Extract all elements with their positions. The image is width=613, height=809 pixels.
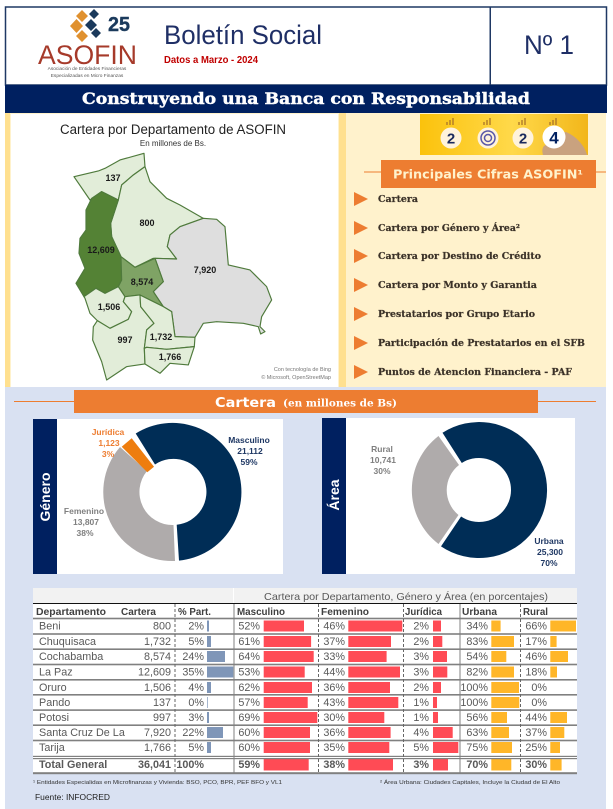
- section heading: Cartera: [14, 390, 596, 413]
- table row: Santa Cruz: 4%: [413, 727, 429, 739]
- date subtitle: Datos a Marzo - 2024: [164, 55, 258, 66]
- label: Área: Área: [326, 479, 342, 511]
- donut: area: [412, 422, 547, 558]
- header box: [6, 7, 606, 85]
- banner image: 2024: [420, 114, 588, 155]
- table row: Total General: 30%: [525, 759, 547, 771]
- logo: ASOFIN: Especializadas en Micro Finanzas: [51, 73, 124, 79]
- label: Urbana: Urbana: [534, 536, 564, 546]
- table row: Total General: 59%: [238, 759, 260, 771]
- table row: Santa Cruz: 7,920: [144, 727, 171, 739]
- slogan band: Construyendo una Banca con Responsabilidad: [82, 89, 530, 108]
- table super heading: Cartera por Departamento, Género y Área (en porcentajes): [264, 590, 548, 603]
- banner image: 2024: 2: [447, 130, 455, 148]
- table row: Pando: 100%: [460, 697, 488, 709]
- table row: Pando: 0%: [188, 697, 204, 709]
- table column headers: [36, 606, 548, 618]
- label: Género: Género: [37, 472, 53, 522]
- table row: Beni: Beni: [39, 620, 61, 632]
- panel: gender donut chart: [33, 419, 283, 574]
- table data bars: area: [491, 620, 576, 770]
- table row: La Paz: La Paz: [39, 666, 73, 678]
- table row: Oruro: 0%: [531, 682, 547, 694]
- map values: 800: [139, 218, 155, 228]
- label: Masculino: 59%: [240, 457, 258, 467]
- top section background: [5, 113, 606, 387]
- footnote 1: ¹ Entidades Especialidas en Microfinanzas y Vivienda: BSO, PCO, BPR, PEF BFO y VL1: [33, 780, 282, 786]
- table row: Tarija: Tarija: [39, 742, 65, 754]
- table row: Chuquisaca: 5%: [188, 636, 204, 648]
- table column headers: Departamento: [36, 606, 106, 618]
- table row: La Paz: 3%: [413, 666, 429, 678]
- map values: 137: [105, 173, 121, 183]
- table row: La Paz: 44%: [323, 666, 345, 678]
- map title: Cartera por Departamento de ASOFIN: [60, 122, 286, 137]
- table row: Cochabamba: 8,574: [144, 651, 171, 663]
- section heading: Cartera: (en millones de Bs): [283, 398, 397, 410]
- section heading: Principales Cifras: [364, 160, 606, 188]
- list of contents: Cartera por Monto y Garantia: [378, 280, 537, 291]
- label: Urbana: 25,300: [537, 547, 563, 557]
- table row: Beni: 800: [153, 620, 171, 632]
- table row: Pando: Pando: [39, 697, 70, 709]
- title: Boletín Social: Boletín Social: [164, 20, 322, 50]
- table row: Chuquisaca: [39, 636, 547, 648]
- table row: Potosi: 3%: [188, 712, 204, 724]
- panel: map of portfolio by department: [11, 114, 338, 387]
- table row: Tarija: [39, 742, 547, 754]
- lower section background: [5, 387, 606, 809]
- table row: Oruro: Oruro: [39, 682, 67, 694]
- table row: Potosi: 30%: [323, 712, 345, 724]
- table row: Beni: [39, 620, 547, 632]
- table row: Beni: 52%: [238, 620, 260, 632]
- table row: Beni: 2%: [413, 620, 429, 632]
- label: Femenino: 13,807: [73, 517, 99, 527]
- label: Rural: [370, 444, 396, 476]
- list of contents: Prestatarios por Grupo Etario: [378, 309, 535, 320]
- table row: La Paz: 18%: [525, 666, 547, 678]
- label: Femenino: Femenino: [64, 506, 104, 516]
- table row: Pando: 0%: [531, 697, 547, 709]
- table column headers: Urbana: [462, 606, 497, 618]
- table row: Chuquisaca: 61%: [238, 636, 260, 648]
- table row: Cochabamba: Cochabamba: [39, 651, 103, 663]
- map values: 1,732: [150, 332, 172, 342]
- section heading: Principales Cifras: Principales Cifras ASOFIN¹: [393, 168, 583, 182]
- table row: Santa Cruz: 36%: [323, 727, 345, 739]
- table row lines: [33, 603, 577, 774]
- label: Rural: 10,741: [370, 455, 396, 465]
- table row: Chuquisaca: 17%: [525, 636, 547, 648]
- label: Jurídica: 3%: [102, 449, 115, 459]
- footnote 2: ² Área Urbana: Ciudades Capitales, Incluye la Ciudad de El Alto: [380, 779, 560, 786]
- choropleth map: [74, 153, 272, 380]
- table row: Potosi: 44%: [525, 712, 547, 724]
- label: Rural: 30%: [373, 466, 391, 476]
- table row: Oruro: 2%: [413, 682, 429, 694]
- table column headers: Jurídica: [405, 606, 442, 618]
- table data bars: share: [207, 620, 233, 753]
- map values: 8,574: [131, 277, 153, 287]
- table row: Santa Cruz: 60%: [238, 727, 260, 739]
- table row: Chuquisaca: 83%: [466, 636, 488, 648]
- label: Masculino: [228, 435, 270, 467]
- table row: Total General: Total General: [39, 759, 107, 771]
- label: Urbana: 70%: [540, 558, 558, 568]
- table row: Cochabamba: 64%: [238, 651, 260, 663]
- table row: Santa Cruz: 22%: [182, 727, 204, 739]
- table row: Potosi: Potosi: [39, 712, 69, 724]
- label: Femenino: 38%: [76, 528, 94, 538]
- table row: Oruro: 1,506: [144, 682, 171, 694]
- table row: Beni: 34%: [466, 620, 488, 632]
- table row: Chuquisaca: 2%: [413, 636, 429, 648]
- list of contents: [354, 192, 585, 379]
- table row: Total General: 3%: [413, 759, 429, 771]
- map attribution: Con tecnología de Bing: [274, 367, 331, 373]
- table column headers: Rural: [523, 606, 548, 618]
- table row: Potosi: 69%: [238, 712, 260, 724]
- issue number: Nº 1: [524, 30, 574, 60]
- logo: ASOFIN: Asociación de Entidades Financieras: [48, 66, 127, 72]
- logo: ASOFIN: [38, 9, 137, 79]
- list of contents: Cartera: [378, 194, 418, 205]
- table row: Potosi: [39, 712, 547, 724]
- table row: Total General: 70%: [466, 759, 488, 771]
- banner image: 2024: 4: [549, 128, 559, 148]
- label: Urbana: [534, 536, 564, 568]
- table row: Potosi: 1%: [413, 712, 429, 724]
- table row: Cochabamba: 24%: [182, 651, 204, 663]
- table row: Oruro: 62%: [238, 682, 260, 694]
- label: Rural: Rural: [371, 444, 393, 454]
- table row: La Paz: 82%: [466, 666, 488, 678]
- table row: Oruro: 4%: [188, 682, 204, 694]
- list of contents: Participación de Prestatarios en el SFB: [378, 338, 585, 349]
- table row: Chuquisaca: 1,732: [144, 636, 171, 648]
- map values: [87, 173, 216, 362]
- table row: Pando: 137: [153, 697, 171, 709]
- label: Masculino: Masculino: [228, 435, 270, 445]
- table row: Tarija: 25%: [525, 742, 547, 754]
- map subtitle: En millones de Bs.: [140, 139, 206, 148]
- slogan band: [5, 85, 607, 113]
- list of contents: Puntos de Atencion Financiera - PAF: [378, 367, 572, 378]
- table row: Total General: 38%: [323, 759, 345, 771]
- table row: La Paz: 12,609: [138, 666, 171, 678]
- source: Fuente: INFOCRED: [35, 793, 110, 802]
- table: portfolio by department, gender and area: [33, 588, 577, 774]
- table row: Total General: [39, 759, 547, 771]
- list of contents: Cartera por Género y Área²: [378, 222, 520, 234]
- label: Jurídica: [92, 427, 125, 459]
- table row: Tarija: 1,766: [144, 742, 171, 754]
- map values: 1,766: [159, 352, 181, 362]
- table row: Tarija: 35%: [323, 742, 345, 754]
- table row: La Paz: 35%: [182, 666, 204, 678]
- table row: Cochabamba: 54%: [466, 651, 488, 663]
- table row: Beni: 46%: [323, 620, 345, 632]
- table column headers: Femenino: [321, 606, 369, 618]
- table row: Chuquisaca: Chuquisaca: [39, 636, 96, 648]
- table row: Beni: 66%: [525, 620, 547, 632]
- map values: 12,609: [87, 245, 115, 255]
- table row: Total General: 36,041: [138, 759, 171, 771]
- logo: ASOFIN: ASOFIN: [38, 40, 137, 70]
- table row: Santa Cruz: 63%: [466, 727, 488, 739]
- banner image: 2024: 2: [519, 130, 527, 148]
- label: Jurídica: 1,123: [98, 438, 120, 448]
- table row: Cochabamba: 3%: [413, 651, 429, 663]
- map attribution: © Microsoft, OpenStreetMap: [261, 374, 331, 381]
- table row: La Paz: [39, 666, 547, 678]
- map attribution: [261, 367, 331, 381]
- table row: Potosi: 56%: [466, 712, 488, 724]
- map values: 997: [117, 335, 133, 345]
- table row: Tarija: 75%: [466, 742, 488, 754]
- table column headers: % Part.: [178, 606, 211, 618]
- logo: ASOFIN: 25: [108, 14, 130, 36]
- table row: La Paz: 53%: [238, 666, 260, 678]
- table row: Tarija: 60%: [238, 742, 260, 754]
- table row: Tarija: 5%: [188, 742, 204, 754]
- table row: Pando: 1%: [413, 697, 429, 709]
- panel: area donut chart: [322, 418, 575, 574]
- table row: Pando: 43%: [323, 697, 345, 709]
- table row: Potosi: 997: [153, 712, 171, 724]
- table row: Santa Cruz: [39, 727, 547, 739]
- panel: key figures: [354, 114, 606, 379]
- map values: 1,506: [98, 302, 120, 312]
- donut: gender: [103, 423, 241, 561]
- table row: Beni: 2%: [188, 620, 204, 632]
- table row: Tarija: 5%: [413, 742, 429, 754]
- table row: Cochabamba: [39, 651, 547, 663]
- table row: Oruro: 100%: [460, 682, 488, 694]
- map values: 7,920: [194, 265, 216, 275]
- table row: Oruro: 36%: [323, 682, 345, 694]
- table column headers: Masculino: [237, 606, 285, 618]
- table row: Cochabamba: 33%: [323, 651, 345, 663]
- table data bars: gender: [264, 620, 458, 770]
- table row: Santa Cruz: Santa Cruz De La: [39, 727, 125, 739]
- table row: Pando: 57%: [238, 697, 260, 709]
- label: Jurídica: Jurídica: [92, 427, 125, 437]
- table row: Cochabamba: 46%: [525, 651, 547, 663]
- section heading: Cartera: Cartera: [215, 395, 276, 411]
- table row: Chuquisaca: 37%: [323, 636, 345, 648]
- table row: Oruro: [39, 682, 547, 694]
- list of contents: Cartera por Destino de Crédito: [378, 251, 541, 262]
- label: Masculino: 21,112: [237, 446, 263, 456]
- table row: Santa Cruz: 37%: [525, 727, 547, 739]
- table row: Pando: [39, 697, 547, 709]
- table row: Total General: 100%: [176, 759, 204, 771]
- table column headers: Cartera: [121, 606, 156, 618]
- label: Femenino: [64, 506, 104, 538]
